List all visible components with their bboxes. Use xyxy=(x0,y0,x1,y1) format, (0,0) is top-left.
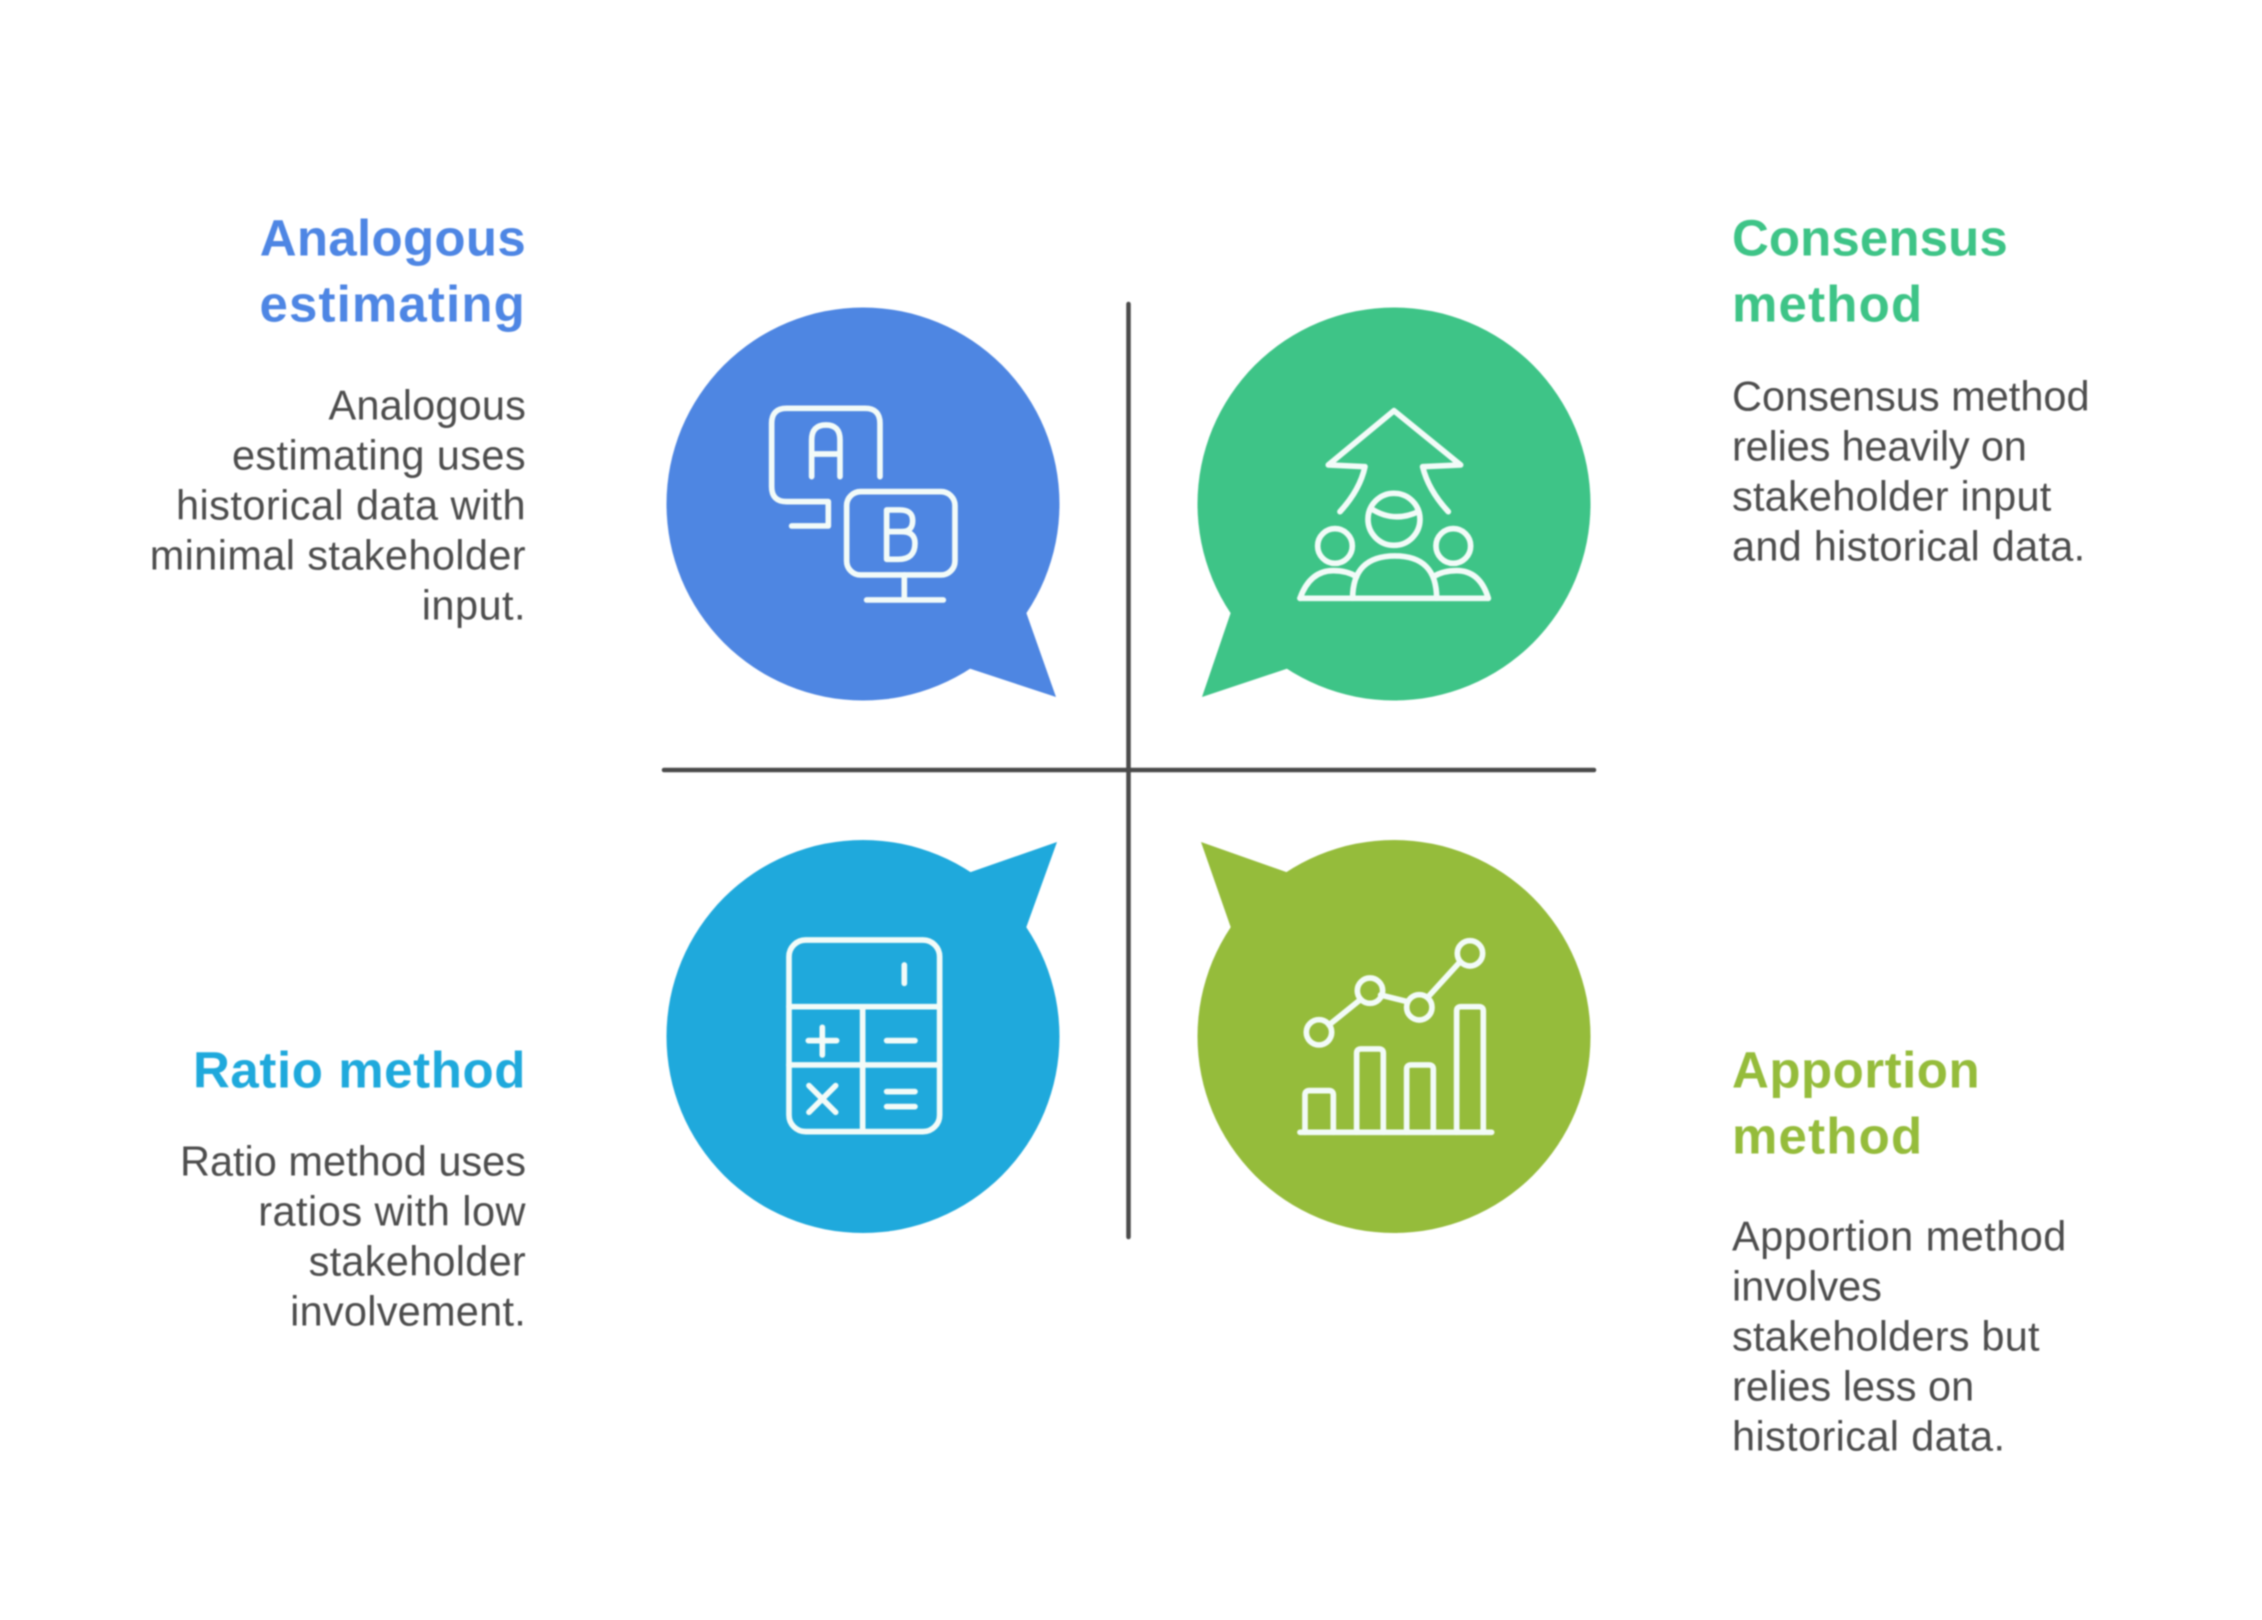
text block: Consensus description: Consensus method xyxy=(1732,372,2090,419)
text block: Apportion description: relies less on xyxy=(1732,1362,1974,1409)
text block: Ratio description: stakeholder xyxy=(309,1237,526,1284)
heading: Ratio method: Ratio method xyxy=(193,1042,526,1099)
text block: Apportion description: involves xyxy=(1732,1262,1882,1309)
text block: Consensus description: stakeholder input xyxy=(1732,472,2052,519)
icon: team with upward arrow xyxy=(1300,411,1488,598)
heading: Apportion method: Apportion xyxy=(1732,1042,1980,1099)
speech bubble: cyan xyxy=(666,840,1060,1233)
icon: calculator xyxy=(789,940,940,1132)
text block: Apportion description: stakeholders but xyxy=(1732,1312,2040,1359)
text block: Analogous description: estimating uses xyxy=(232,431,526,478)
icon: bar and line chart xyxy=(1300,941,1492,1132)
text block: Consensus description: and historical data. xyxy=(1732,522,2085,569)
heading: Apportion method: method xyxy=(1732,1108,1923,1165)
text block: Consensus description: relies heavily on xyxy=(1732,422,2027,469)
text block: Ratio description: Ratio method uses xyxy=(180,1137,526,1184)
panel: Consensus method xyxy=(1198,210,2090,700)
heading: Consensus method: Consensus xyxy=(1732,210,2008,267)
speech bubble: lime xyxy=(1198,840,1590,1233)
panel: Apportion method xyxy=(1198,840,2067,1459)
text block: Analogous description: input. xyxy=(422,581,526,628)
speech bubble: green xyxy=(1198,308,1590,700)
panel: Ratio method xyxy=(180,840,1060,1334)
heading: Analogous estimating: Analogous xyxy=(260,210,526,267)
icon: A/B comparison xyxy=(772,408,955,600)
text block: Ratio description: ratios with low xyxy=(258,1187,527,1234)
quadrant axes xyxy=(664,304,1594,1237)
text block: Apportion description: historical data. xyxy=(1732,1412,2005,1459)
text block: Analogous description: historical data with xyxy=(176,481,526,528)
heading: Consensus method: method xyxy=(1732,276,1923,332)
text block: Analogous description: minimal stakeholder xyxy=(150,531,526,578)
text block: Analogous description: Analogous xyxy=(329,381,526,428)
text block: Apportion description: Apportion method xyxy=(1732,1212,2067,1259)
speech bubble: blue xyxy=(666,308,1060,700)
heading: Analogous estimating: estimating xyxy=(259,276,526,332)
text block: Ratio description: involvement. xyxy=(290,1287,526,1334)
panel: Analogous estimating xyxy=(150,210,1060,700)
